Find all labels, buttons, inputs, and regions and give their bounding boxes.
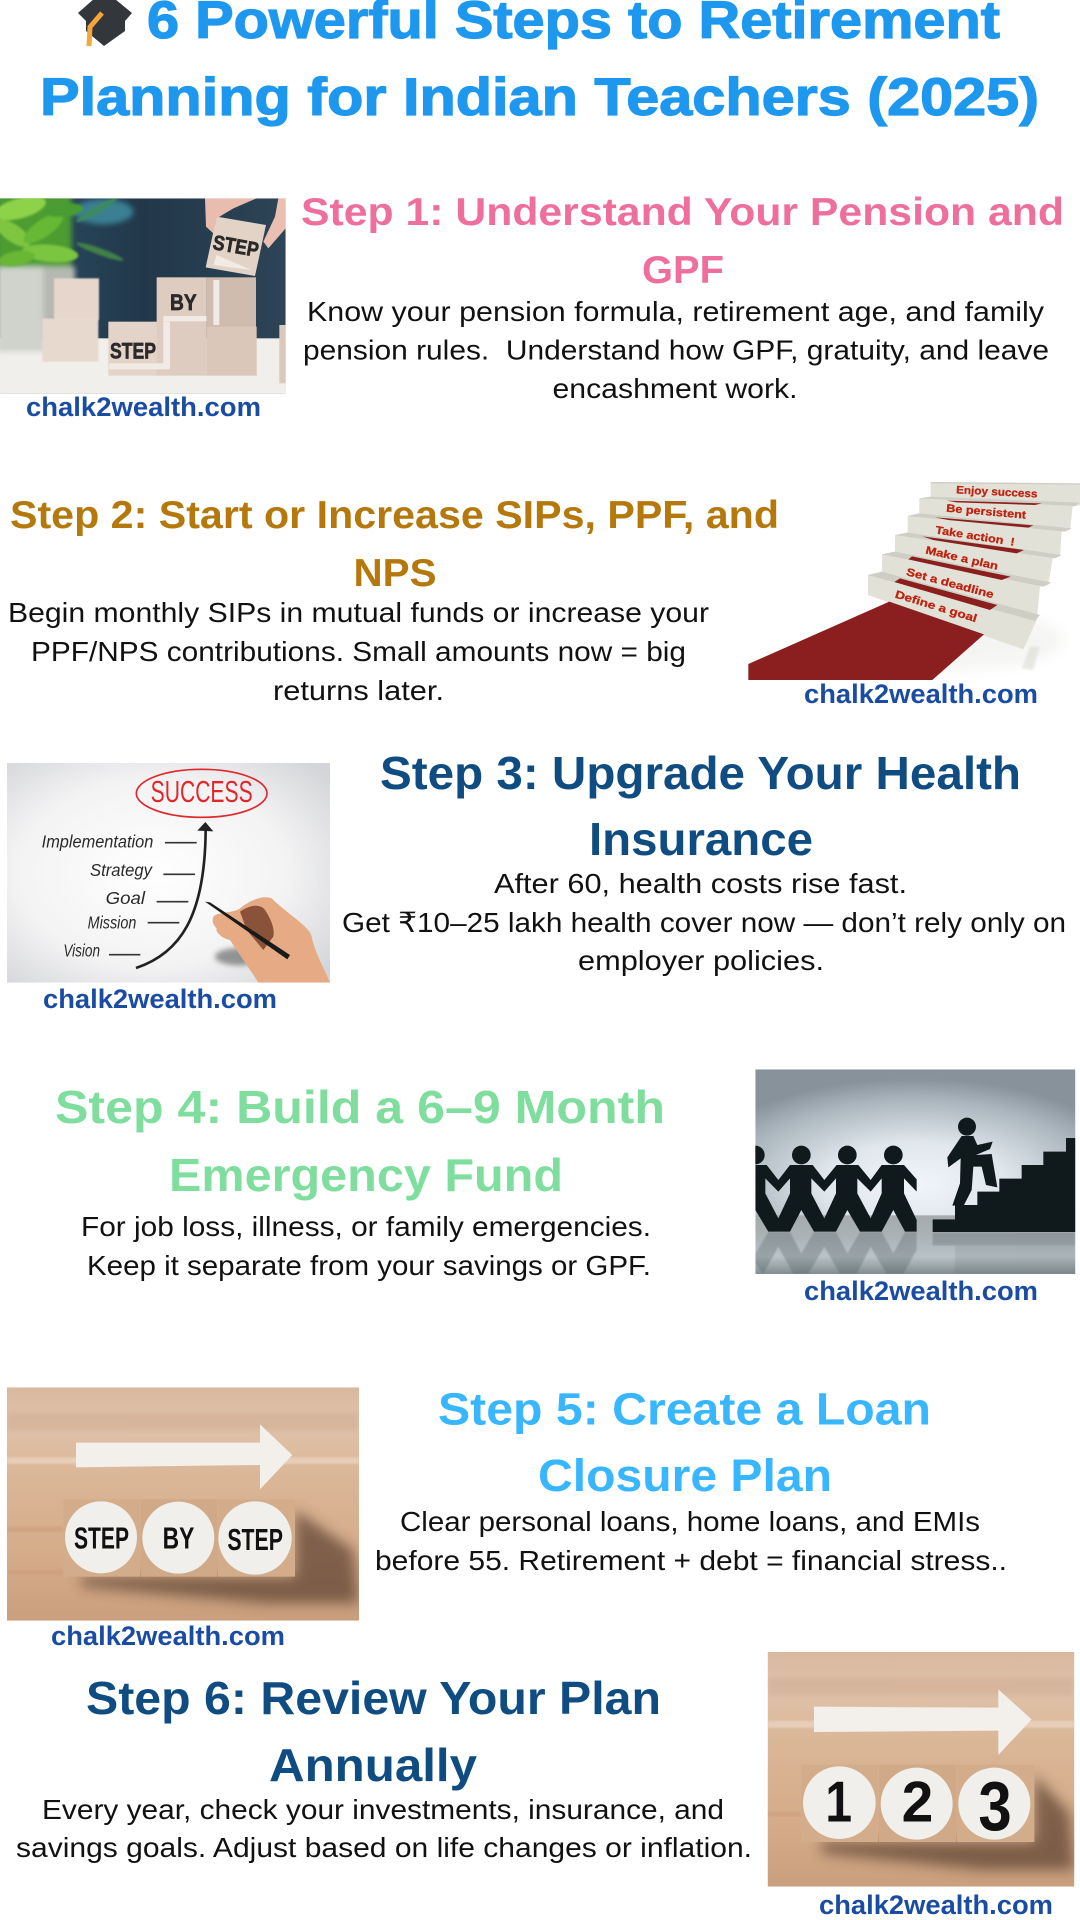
heading: Closure Plan: [538, 1450, 832, 1501]
image: 1 2 3 cubes with arrow: 3: [978, 1767, 1012, 1845]
image: 1 2 3 cubes with arrow: 2: [902, 1770, 933, 1834]
image: step by step cubes with arrow: BY: [163, 1522, 194, 1556]
heading: Step 5: Create a Loan: [438, 1384, 931, 1434]
heading: [86, 1672, 661, 1791]
body text: before 55. Retirement + debt = financial stress..: [375, 1545, 1007, 1576]
body text: [8, 597, 709, 706]
image: step by step wooden blocks: [0, 192, 286, 393]
image: staircase with red carpet: Make a plan: [924, 545, 999, 573]
image: staircase with red carpet: Define a goal: [893, 589, 978, 625]
watermark: chalk2wealth.com: [51, 1621, 285, 1651]
image: staircase with red carpet: Set a deadline: [905, 566, 995, 601]
image: success plan hand-drawn chart: SUCCESS: [151, 775, 253, 809]
heading: [10, 494, 779, 595]
heading: Emergency Fund: [169, 1149, 563, 1201]
body text: Know your pension formula, retirement age, and family: [307, 296, 1044, 327]
image: staircase with red carpet: Take action !: [935, 524, 1015, 549]
body text: [81, 1211, 651, 1281]
body text: [303, 296, 1049, 404]
image: step by step cubes with arrow: [7, 1387, 359, 1621]
image: 1 2 3 cubes with arrow: [768, 1652, 1074, 1887]
image: step by step wooden blocks: STEP: [110, 338, 156, 363]
image: step by step cubes with arrow: STEP: [227, 1523, 283, 1557]
panel: step 2: [8, 482, 1080, 709]
heading: Step 2: Start or Increase SIPs, PPF, and: [10, 494, 779, 537]
panel: step 3: [7, 747, 1066, 1014]
title: [40, 0, 1039, 127]
body text: After 60, health costs rise fast.: [494, 868, 907, 899]
heading: [438, 1384, 931, 1501]
heading: [380, 747, 1021, 865]
image: success plan hand-drawn chart: Goal: [106, 888, 146, 908]
body text: For job loss, illness, or family emergencies.: [81, 1211, 651, 1242]
heading: Step 3: Upgrade Your Health: [380, 747, 1021, 799]
body text: [16, 1794, 752, 1863]
body text: savings goals. Adjust based on life changes or inflation.: [16, 1832, 752, 1863]
watermark: chalk2wealth.com: [804, 1276, 1038, 1306]
panel: step 5: [7, 1384, 1007, 1651]
body text: returns later.: [273, 675, 444, 706]
heading: [301, 191, 1064, 292]
title: Planning for Indian Teachers (2025): [40, 68, 1039, 127]
icon: graduation cap: [78, 0, 132, 46]
body text: [342, 868, 1066, 976]
panel: step 4: [55, 1069, 1075, 1306]
image: success plan hand-drawn chart: [7, 763, 330, 983]
image: step by step wooden blocks: STEP: [211, 231, 261, 262]
body text: [375, 1506, 1007, 1576]
heading: Step 1: Understand Your Pension and: [301, 191, 1064, 234]
image: success plan hand-drawn chart: Mission: [88, 912, 136, 932]
heading: Annually: [269, 1739, 477, 1791]
image: staircase with red carpet: Enjoy success: [956, 484, 1038, 501]
watermark: chalk2wealth.com: [26, 392, 261, 422]
reflections: [755, 1232, 1075, 1274]
image: step by step cubes with arrow: STEP: [74, 1522, 129, 1556]
body text: pension rules. Understand how GPF, gratuity, and leave: [303, 334, 1049, 366]
body text: Keep it separate from your savings or GPF.: [87, 1250, 651, 1281]
image: success plan hand-drawn chart: Strategy: [90, 860, 153, 880]
image: 1 2 3 cubes with arrow: 1: [825, 1771, 852, 1835]
image: staircase with red carpet: Be persistent: [946, 503, 1027, 522]
image: step by step wooden blocks: BY: [170, 290, 197, 315]
image: success plan hand-drawn chart: Vision: [63, 941, 100, 961]
watermark: chalk2wealth.com: [804, 679, 1038, 709]
body text: Clear personal loans, home loans, and EMIs: [400, 1506, 980, 1537]
panel: step 6: [16, 1652, 1074, 1920]
watermark: chalk2wealth.com: [43, 984, 277, 1014]
image: paper figures and climber on stairs: [746, 1069, 1075, 1274]
body text: Get ₹10–25 lakh health cover now — don’t rely only on: [342, 907, 1066, 938]
body text: employer policies.: [578, 945, 824, 976]
heading: Step 6: Review Your Plan: [86, 1672, 661, 1724]
heading: Step 4: Build a 6–9 Month: [55, 1081, 665, 1133]
panel: step 1: [0, 191, 1064, 422]
body text: Begin monthly SIPs in mutual funds or increase your: [8, 597, 709, 628]
image: success plan hand-drawn chart: Implementation: [42, 831, 153, 851]
heading: Insurance: [589, 813, 813, 865]
watermark: chalk2wealth.com: [819, 1890, 1053, 1920]
body text: Every year, check your investments, insurance, and: [42, 1794, 724, 1825]
heading: NPS: [354, 552, 436, 595]
heading: GPF: [642, 249, 724, 292]
image: staircase with red carpet: [748, 482, 1080, 680]
heading: [55, 1081, 665, 1201]
body text: PPF/NPS contributions. Small amounts now = big: [31, 636, 686, 667]
body text: encashment work.: [552, 373, 798, 404]
